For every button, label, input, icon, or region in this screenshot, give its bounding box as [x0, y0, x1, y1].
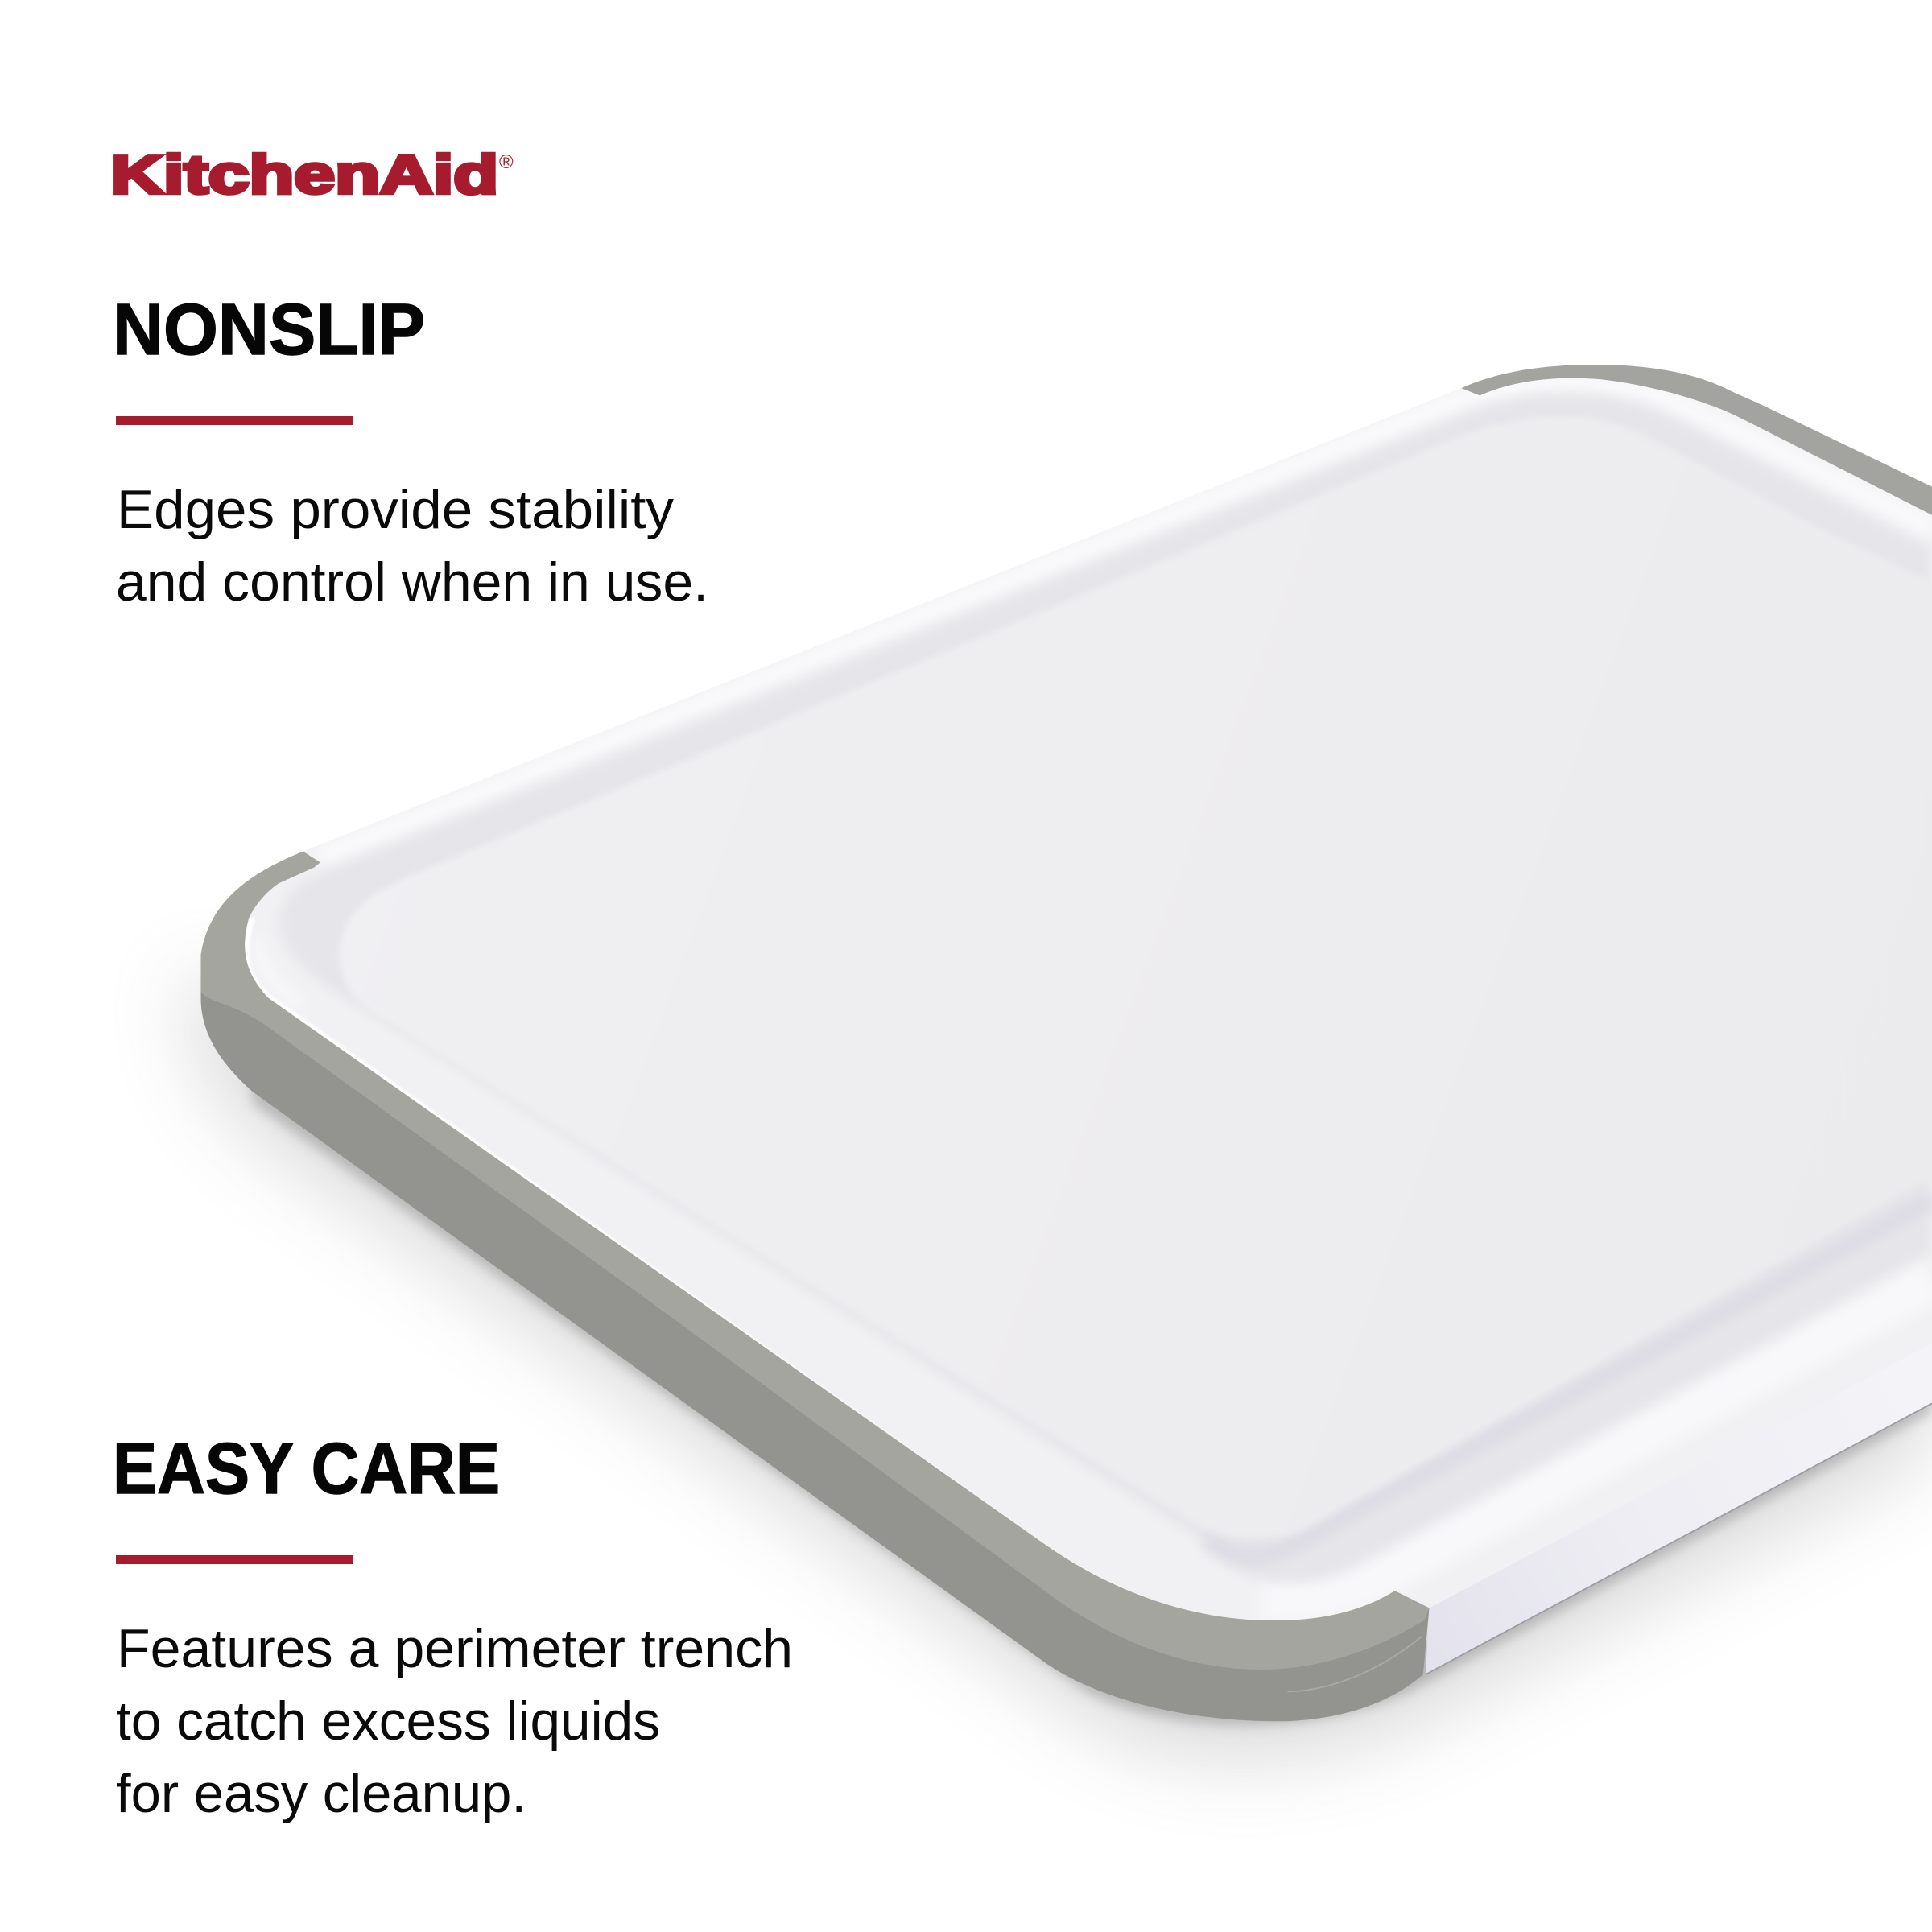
section: nonslip: [113, 290, 708, 613]
registered mark: ®: [499, 151, 514, 173]
board side bottom edge: [1426, 1403, 1932, 1674]
text: nonslip description: [116, 479, 708, 613]
contact shadow: [253, 1072, 1932, 1725]
top-right gray rim strip: [1461, 365, 1932, 515]
white board top surface: [245, 385, 1932, 1620]
text: nonslip description: Edges provide stability: [117, 479, 674, 540]
soft ground shadow: [185, 973, 1932, 1761]
red divider: [116, 1555, 353, 1564]
left corner highlight: [256, 936, 302, 1005]
gray rim top face: [200, 852, 1429, 1670]
text: easy care description: [116, 1618, 793, 1824]
top ledge highlight: [317, 861, 320, 863]
section: easy care: [113, 1429, 793, 1824]
heading: easy care: EASY CARE: [113, 1429, 500, 1509]
product photo: cutting board: [185, 357, 1932, 1761]
text: easy care description: Features a perimeter trench: [117, 1618, 793, 1679]
text: easy care description: to catch excess liquids: [116, 1690, 660, 1752]
trench: [279, 393, 1932, 1583]
gray rim side face: [200, 852, 1429, 1721]
white board side face: [1426, 1343, 1932, 1674]
red divider: [116, 416, 353, 425]
text: easy care description: for easy cleanup.: [116, 1763, 526, 1824]
bottom-right ledge highlight: [1265, 1591, 1399, 1620]
text: nonslip description: and control when in use.: [116, 551, 708, 613]
rim seam line: [1287, 1637, 1422, 1692]
KitchenAid logo: [110, 144, 514, 205]
rim-side white line: [245, 918, 1096, 1575]
board base: [245, 404, 1932, 1620]
bottom trench shading: [1206, 1200, 1932, 1558]
logo wordmark: KitchenAid: [110, 144, 498, 205]
heading: nonslip: NONSLIP: [113, 290, 425, 370]
plateau: [341, 634, 1378, 1517]
